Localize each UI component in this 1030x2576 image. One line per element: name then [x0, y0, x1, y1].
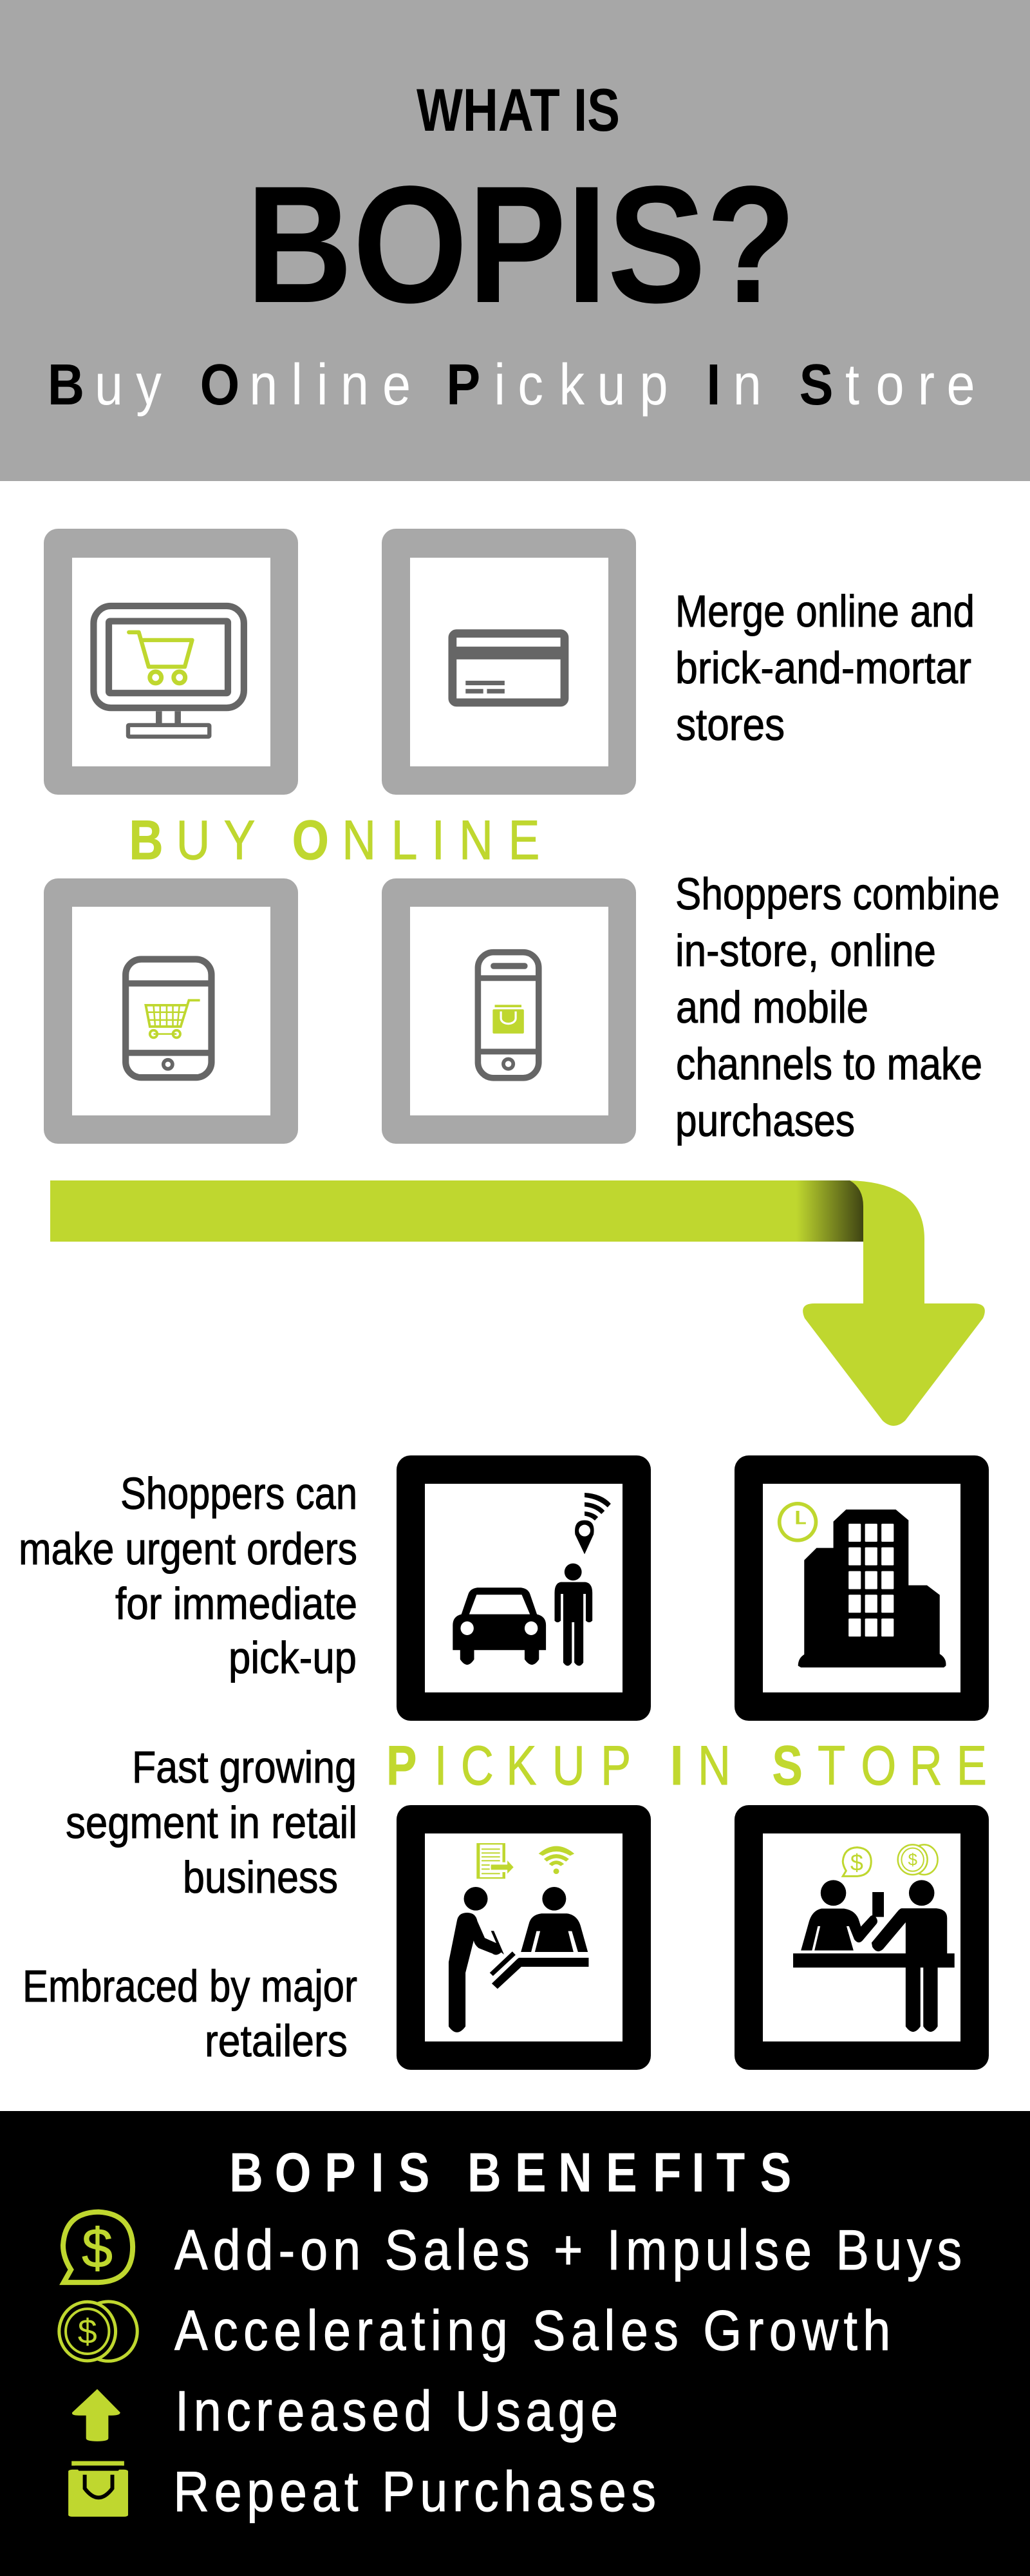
panel: payment at counter icon card — [735, 1805, 989, 2070]
heading: buy online: B — [129, 809, 163, 871]
text block: urgent orders: pick-up — [229, 1633, 357, 1683]
panel: tablet icon card — [44, 878, 298, 1144]
icon: up arrow — [72, 2389, 120, 2441]
subtitle: ickup — [494, 352, 668, 417]
panel: phone icon card — [382, 878, 636, 1144]
text block: fast growing: segment in retail — [66, 1797, 357, 1848]
heading: pickup in store: I — [670, 1734, 683, 1797]
icon: credit card — [453, 634, 565, 703]
title: BOPIS?: BOPIS? — [246, 151, 796, 337]
panel: building icon card — [735, 1455, 989, 1721]
icon: coins — [59, 2302, 137, 2361]
text block: shoppers combine: and mobile — [676, 982, 868, 1032]
heading: bopis benefits: BENEFITS — [467, 2141, 791, 2203]
subtitle: P — [446, 352, 480, 417]
text block: merge online: stores — [676, 699, 785, 750]
arrow: buy online to pickup — [50, 1180, 985, 1426]
title: what is: WHAT IS — [417, 76, 620, 144]
icon: building and clock — [778, 1502, 946, 1667]
benefit: increased usage: Increased Usage — [175, 2379, 618, 2443]
icon: customer and clerk exchanging payment — [793, 1844, 955, 2032]
text block: merge online: Merge online and — [675, 586, 975, 636]
icon: customer at counter with order and wifi — [449, 1843, 588, 2032]
subtitle: O — [200, 352, 239, 417]
icon: tablet with cart — [126, 959, 211, 1077]
text block: urgent orders: for immediate — [115, 1578, 357, 1629]
icon: car, person and location signal — [453, 1493, 611, 1666]
subtitle: S — [800, 352, 834, 417]
heading: buy online: O — [292, 809, 329, 871]
benefit: repeat purchases: Repeat Purchases — [173, 2459, 656, 2523]
header panel — [0, 0, 1030, 481]
heading: pickup in store: N — [698, 1734, 731, 1797]
subtitle: B — [48, 352, 84, 417]
text block: urgent orders: Shoppers can — [120, 1468, 357, 1519]
text block: shoppers combine: channels to make — [676, 1039, 982, 1089]
text block: embraced by retailers — [23, 1961, 357, 2066]
text block: embraced by retailers: Embraced by major — [23, 1961, 357, 2011]
panel: computer icon card — [44, 529, 298, 795]
panel: credit card icon card — [382, 529, 636, 795]
icon: customer and clerk exchanging payment: $ — [850, 1850, 863, 1876]
text block: shoppers combine — [675, 869, 1000, 1146]
heading: pickup in store: S — [772, 1734, 803, 1797]
heading: pickup in store: P — [386, 1734, 417, 1797]
icon: coins: $ — [78, 2313, 97, 2351]
subtitle: nline — [249, 352, 411, 417]
icon: phone with bag — [478, 952, 539, 1078]
heading: buy online: NLINE — [342, 809, 539, 871]
subtitle: uy — [95, 352, 162, 417]
heading: pickup in store: TORE — [818, 1734, 987, 1797]
text block: fast growing — [66, 1742, 357, 1902]
text block: urgent orders: make urgent orders — [19, 1524, 357, 1574]
icon: customer and clerk exchanging payment: $ — [908, 1850, 917, 1870]
heading: buy online: UY — [176, 809, 255, 871]
subtitle: tore — [845, 352, 975, 417]
text block: shoppers combine: purchases — [675, 1095, 855, 1146]
icon: monitor with cart — [93, 606, 244, 737]
text block: fast growing: Fast growing — [132, 1742, 357, 1792]
benefit: accelerating sales growth: Accelerating Sales Growth — [174, 2298, 890, 2362]
text block: merge online — [675, 586, 975, 750]
text block: urgent orders — [19, 1468, 357, 1683]
text block: merge online: brick-and-mortar — [675, 643, 971, 693]
benefit: add-on sales: Add-on Sales + Impulse Buys — [174, 2218, 962, 2282]
icon: dollar speech bubble — [63, 2212, 133, 2282]
panel: order at counter icon card — [397, 1805, 651, 2070]
text block: shoppers combine: in-store, online — [675, 925, 936, 976]
panel: car and person icon card — [397, 1455, 651, 1721]
heading: bopis benefits: BOPIS — [229, 2141, 430, 2203]
icon: shopping bag — [68, 2461, 128, 2517]
panel: bopis benefits — [0, 2111, 1030, 2576]
text block: fast growing: business — [183, 1852, 338, 1902]
icon: dollar speech bubble: $ — [82, 2217, 113, 2279]
subtitle: n — [733, 352, 762, 417]
text block: embraced by retailers: retailers — [205, 2016, 348, 2066]
heading: pickup in store: ICKUP — [435, 1734, 631, 1797]
subtitle: I — [706, 352, 720, 417]
